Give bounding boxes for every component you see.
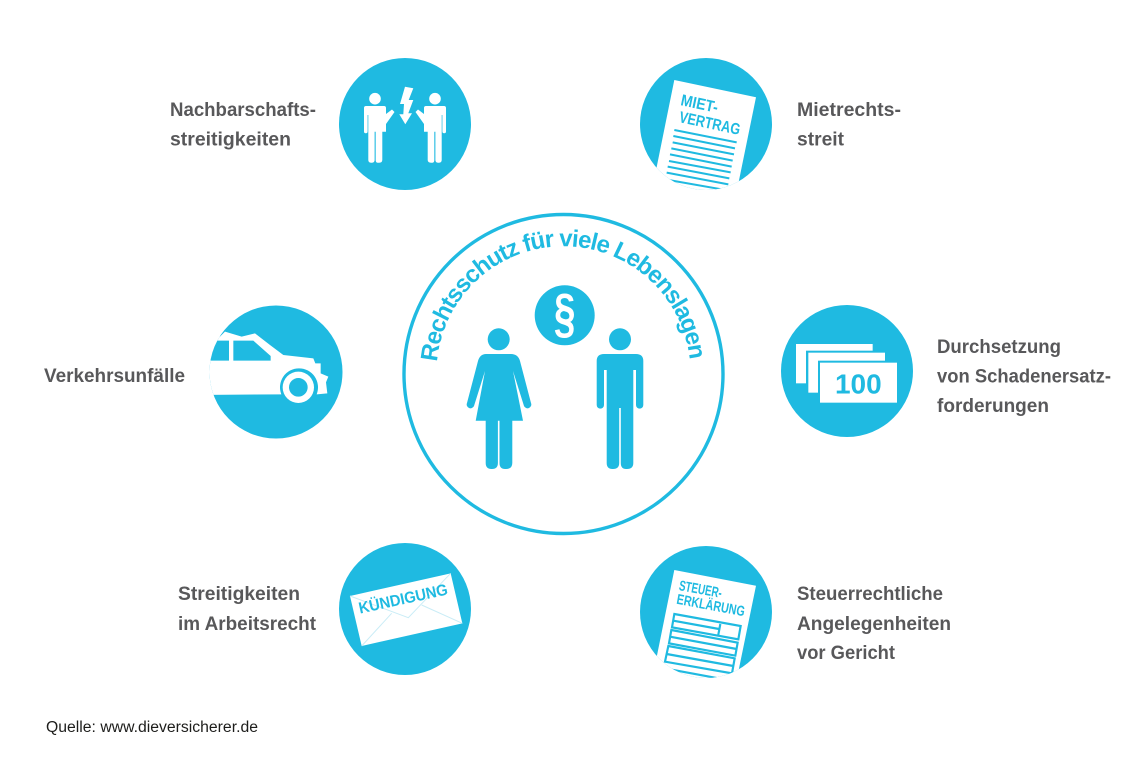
label: Mietrechtsstreit [797, 100, 901, 150]
label: Steuerrechtliche Angelegenheiten vor Gericht [797, 584, 951, 664]
panel: Nachbarschaftsstreitigkeiten [170, 58, 471, 190]
icon: woman [467, 328, 531, 469]
label: Steuerrechtliche Angelegenheiten vor Gericht: Angelegenheiten [797, 614, 951, 635]
panel: Verkehrsunfälle [44, 306, 342, 438]
panel: Streitigkeiten im Arbeitsrecht [178, 543, 471, 675]
label: Verkehrsunfälle: Verkehrsunfälle [44, 366, 185, 387]
icon: tax return document: ERKLÄRUNG [675, 591, 746, 620]
panel: Mietrechtsstreit [640, 58, 900, 190]
label: Streitigkeiten im Arbeitsrecht [178, 584, 317, 635]
icon: banknotes [781, 305, 913, 437]
label: Steuerrechtliche Angelegenheiten vor Gericht: Steuerrechtliche [797, 584, 943, 605]
icon: tax return document: STEUER- [678, 578, 723, 602]
icon: banknotes: 100 [835, 368, 882, 399]
panel: Durchsetzung von Schadenersatzforderungen [781, 305, 1111, 437]
source note: Quelle: www.dieversicherer.de [46, 719, 258, 736]
icon: paragraph symbol [535, 284, 595, 345]
icon: termination letter envelope [339, 543, 471, 675]
label: Streitigkeiten im Arbeitsrecht: im Arbeitsrecht [178, 614, 317, 635]
icon: paragraph symbol: § [554, 284, 576, 345]
icon: man [597, 328, 643, 469]
heading: Rechtsschutz für viele Lebenslagen: Rechtsschutz für viele Lebenslagen [420, 229, 702, 360]
label: Nachbarschaftsstreitigkeiten [170, 100, 316, 150]
icon: damaged car [200, 306, 342, 438]
icon: rental contract document: VERTRAG [678, 109, 742, 139]
label: Nachbarschaftsstreitigkeiten: streitigkeiten [170, 130, 291, 150]
label: Durchsetzung von Schadenersatzforderungen: von Schadenersatz- [937, 366, 1111, 388]
label: Nachbarschaftsstreitigkeiten: Nachbarschafts- [170, 100, 316, 121]
label: Mietrechtsstreit: Mietrechts- [797, 100, 901, 121]
label: Durchsetzung von Schadenersatzforderungen: forderungen [937, 396, 1049, 417]
icon: rental contract document [640, 58, 772, 190]
label: Mietrechtsstreit: streit [797, 130, 845, 150]
label: Streitigkeiten im Arbeitsrecht: Streitigkeiten [178, 584, 300, 605]
icon: two arguing men with lightning [339, 58, 471, 190]
icon: termination letter envelope: KÜNDIGUNG [357, 580, 449, 618]
panel: central circle [402, 212, 725, 536]
icon: rental contract document: MIET- [679, 92, 720, 117]
label: Durchsetzung von Schadenersatzforderungen: Durchsetzung [937, 337, 1061, 358]
panel: Steuerrechtliche Angelegenheiten vor Gericht [640, 546, 950, 678]
label: Durchsetzung von Schadenersatzforderungen [937, 337, 1111, 417]
label: Steuerrechtliche Angelegenheiten vor Gericht: vor Gericht [797, 643, 896, 664]
icon: tax return document [640, 546, 772, 678]
